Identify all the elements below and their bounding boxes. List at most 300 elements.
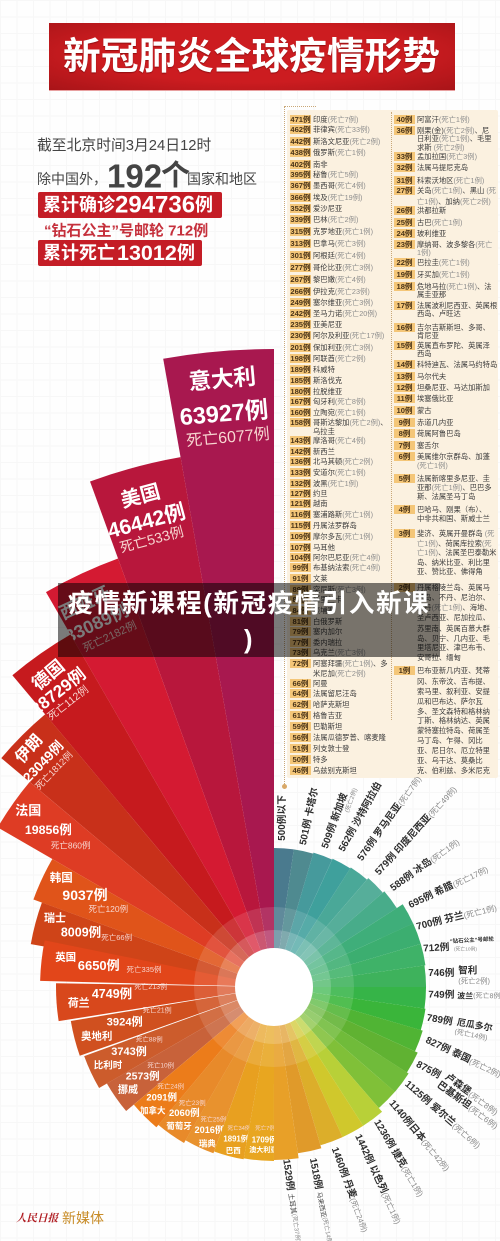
text: 乌兹别克斯坦 — [313, 766, 357, 775]
wedge: 奥地利 — [71, 987, 280, 1056]
wedge: 爱尔兰: 1125例 爱尔兰(死亡6例) — [402, 1077, 484, 1151]
text: 3例 — [399, 529, 410, 538]
wedge: 以色列: 1442例 以色列(死亡1例) — [352, 1132, 405, 1226]
text: 爱沙尼亚 — [313, 204, 342, 213]
wedge: 泰国 — [268, 987, 500, 1080]
text: 亚美尼亚 — [313, 320, 342, 329]
text: 新西兰 — [313, 447, 335, 456]
wedge: 厄瓜多尔 — [271, 987, 494, 1042]
wedge: 瑞士 — [27, 903, 274, 1027]
text: 115例 — [291, 521, 310, 530]
text: 巴勒斯坦 — [313, 722, 342, 731]
text: 丁斯、格林纳达、英属 — [417, 716, 490, 725]
wedge: 澳大利亚: 澳大利亚 — [249, 1145, 277, 1154]
wedge: 马来西亚 — [251, 987, 337, 1241]
text: 特多 — [313, 755, 328, 764]
text: 阿尔巴尼亚(死亡4例) — [313, 553, 380, 562]
text: 埃及(死亡19例) — [313, 193, 362, 202]
wedge: 罗马尼亚: 576例 罗马尼亚(死亡7例) — [354, 772, 424, 863]
text: 赤道几内亚 — [417, 418, 453, 427]
text: 克罗地亚(死亡1例) — [313, 227, 373, 236]
text: 美属维尔京群岛、加蓬 — [417, 452, 490, 461]
left half: wedges with labels — [0, 349, 304, 1164]
text: 367例 — [290, 181, 311, 190]
wedge: 美国: 美国 — [118, 480, 163, 513]
text: 107例 — [290, 543, 311, 552]
wedge: 美国 — [89, 457, 274, 1003]
text: 巴拉圭(死亡1例) — [417, 258, 470, 267]
wedge: 土耳其 — [250, 987, 305, 1241]
text: 墨西哥(死亡4例) — [313, 181, 366, 190]
text: 亚、乌干达、莫桑比 — [417, 756, 483, 765]
text: 苏丹(死亡1例)、海地、 — [417, 603, 492, 612]
wedge: 芬兰: 700例 芬兰(死亡1例) — [415, 900, 498, 933]
logo: People's Daily new media — [16, 1210, 104, 1226]
text: 1例) — [417, 248, 431, 257]
wedge: 英国 — [37, 940, 274, 1027]
text: 法属波利尼西亚、英属根 — [417, 301, 497, 310]
text: 玻利维亚 — [417, 229, 446, 238]
text: 克、伯利兹、多米尼克 — [417, 766, 490, 775]
wedge: 荷兰: 4749例 — [92, 986, 132, 1001]
confirmed cases label: 累计确诊 — [43, 194, 116, 215]
text: 230例 — [290, 331, 311, 340]
deaths label: 例 — [177, 243, 195, 263]
text: 136例 — [290, 457, 311, 466]
text: 巴哈马、刚果（布）、 — [417, 505, 486, 514]
text: 布基纳法索(死亡4例) — [313, 563, 380, 572]
wedge: 瑞典: 瑞典 — [199, 1138, 216, 1148]
text: 31例 — [396, 176, 413, 185]
text: 安道尔(死亡1例) — [313, 468, 366, 477]
text: 235例 — [290, 320, 311, 329]
text: 岛、贝宁、几内亚、毛 — [417, 634, 490, 643]
title banner — [49, 23, 455, 91]
text: 59例 — [292, 722, 309, 731]
text: 秘鲁(死亡5例) — [313, 170, 358, 179]
text: 蒙特塞拉特岛、荷属圣 — [417, 726, 490, 735]
text: 柬埔寨 — [313, 606, 335, 615]
text: 斯里兰卡 — [313, 595, 342, 604]
wedge: 澳大利亚: 1709例 — [252, 1134, 277, 1144]
wedge: 比利时: 死亡88例 — [136, 1034, 163, 1044]
text: 摩纳哥、波多黎各(死亡 — [417, 240, 492, 249]
wedge: 瑞士: 死亡66例 — [101, 932, 132, 942]
wedge: 伊朗: 伊朗 — [12, 731, 46, 767]
text: 埃塞俄比亚 — [417, 394, 453, 403]
text: 巴林(死亡2例) — [313, 215, 358, 224]
wedge: 印度尼西亚 — [274, 782, 459, 1000]
deaths label: 13012 — [117, 241, 177, 265]
text: 109例 — [290, 532, 311, 541]
wedge: 德国: 德国 — [27, 655, 69, 694]
wedge: 捷克 — [256, 987, 428, 1199]
text: 266例 — [290, 287, 311, 296]
wedge: 韩国: 韩国 — [50, 870, 73, 884]
text: 17例 — [396, 301, 413, 310]
text: 孟加拉国(死亡3例) — [417, 152, 477, 161]
wedge: 韩国: 9037例 — [62, 887, 108, 903]
text: 丹属格陵兰岛、英属马 — [417, 583, 490, 592]
text: 摩洛哥(死亡4例) — [313, 436, 366, 445]
wedge: 新加坡 — [274, 787, 359, 993]
text: 7例 — [399, 441, 410, 450]
text: 亡1例)、加纳(死亡2例) — [417, 197, 491, 206]
text: 84例 — [292, 606, 309, 615]
text: 科特迪瓦、法属马约特岛 — [417, 360, 497, 369]
wedge: 厄瓜多尔: 厄瓜多尔 — [456, 1016, 494, 1033]
text: 116例 — [291, 510, 310, 519]
text: 127例 — [290, 489, 311, 498]
text: 64例 — [292, 689, 309, 698]
text: 167例 — [290, 397, 311, 406]
text: 15例 — [396, 341, 413, 350]
confirmed cases label: 例 — [195, 195, 213, 215]
wedge: 法国: 法国 — [15, 803, 41, 818]
text: 米尼加(死亡2例) — [313, 669, 366, 678]
wedge: 法国 — [0, 782, 274, 1029]
text: 吉尔吉斯斯坦、多哥、 — [417, 323, 490, 332]
text: 西岛、卢旺达 — [417, 309, 461, 318]
text: 339例 — [290, 215, 311, 224]
wedge: 500例以下: 500例以下 — [275, 795, 288, 841]
country count: 国家和地区 — [187, 171, 257, 187]
text: 121例 — [290, 499, 311, 508]
text: 古巴(死亡1例) — [417, 218, 462, 227]
text: 岛、纳米比亚、利比里 — [417, 558, 490, 567]
wedge: 挪威: 挪威 — [118, 1083, 138, 1096]
wedge: 卡塔尔 — [274, 786, 321, 990]
text: 26例 — [396, 206, 413, 215]
wedge: 伊朗: 死亡1812例 — [33, 749, 74, 792]
text: 斐济、英属开曼群岛 (死 — [417, 529, 494, 538]
text: 丹属法罗群岛 — [313, 521, 357, 530]
text: 32例 — [396, 163, 413, 172]
text: 立陶宛(死亡1例) — [313, 408, 366, 417]
wedge: 英国: 死亡335例 — [126, 964, 162, 974]
text: 阿根廷(死亡4例) — [313, 251, 366, 260]
wedge: 智利 — [274, 964, 490, 1008]
text: 匈牙利(死亡8例) — [313, 397, 366, 406]
wedge: 印度尼西亚: 579例 印度尼西亚(死亡49例) — [372, 782, 459, 878]
wedge: 比利时 — [84, 987, 286, 1089]
text: 9例 — [399, 418, 410, 427]
logo: People's Daily new media: 新媒体 — [62, 1210, 104, 1226]
wedge: 比利时: 3743例 — [111, 1044, 147, 1058]
text: 19例 — [396, 270, 413, 279]
text: 198例 — [290, 354, 311, 363]
wedge: 巴西 — [214, 987, 303, 1162]
text: 斯洛文尼亚(死亡2例) — [313, 137, 380, 146]
text: 阿塞拜疆(死亡1例)、多 — [313, 659, 388, 668]
wedge: 瑞典: 死亡25例 — [201, 1116, 226, 1124]
text: 法属新喀里多尼亚、圭 — [417, 474, 490, 483]
text: 158例 — [290, 418, 311, 427]
text: 18例 — [396, 282, 413, 291]
text: 菲律宾(死亡33例) — [313, 125, 370, 134]
text: 摩尔多瓦(死亡1例) — [313, 532, 373, 541]
wedge: 罗马尼亚 — [274, 772, 424, 998]
wedge: 荷兰: 荷兰 — [68, 995, 90, 1009]
wedge: 卡塔尔: 501例 卡塔尔 — [296, 786, 321, 846]
text: 圣卢西亚、尼加拉瓜、 — [417, 613, 490, 622]
country list text — [290, 115, 497, 775]
country count: 192 — [107, 158, 162, 194]
wedge: 奥地利: 奥地利 — [81, 1030, 112, 1043]
wedge: 土耳其: 1529例 土耳其 (死亡37例) — [280, 1158, 305, 1241]
text: 日利亚(死亡1例)、毛里 — [417, 134, 492, 143]
text: 73例 — [292, 648, 309, 657]
wedge: 智利: 746例 — [428, 966, 455, 979]
text: 亚、赞比亚、佛得角 — [417, 567, 483, 576]
text: 冈、东帝汶、吉布提、 — [417, 677, 490, 686]
text: 160例 — [290, 408, 311, 417]
logo: People's Daily new media: 人民日报 — [16, 1210, 59, 1226]
text: 249例 — [290, 298, 311, 307]
text: 属圭亚那 — [417, 290, 446, 299]
wedge: 卢森堡 巴基斯坦: 巴基斯坦(死亡6例) — [435, 1078, 500, 1132]
text: 2例 — [399, 583, 410, 592]
wedge: 以色列 — [254, 987, 405, 1226]
text: 洪都拉斯 — [417, 206, 446, 215]
text: 里塔尼亚、津巴布韦、 — [417, 643, 490, 652]
wedge: 沙特阿拉伯 — [274, 779, 384, 995]
text: 俄罗斯(死亡1例) — [313, 148, 366, 157]
text: 南非 — [313, 160, 328, 169]
text: 11例 — [397, 394, 412, 403]
text: 中非共和国、斯威士兰 — [417, 514, 490, 523]
text: 33例 — [396, 152, 413, 161]
text: 438例 — [290, 148, 311, 157]
wedge: 荷兰: 死亡213例 — [134, 982, 167, 991]
text: 10例 — [396, 406, 413, 415]
overlay caption: 疫情新课程(新冠疫情引入新课 — [68, 590, 430, 618]
text: 23例 — [396, 240, 413, 249]
wedge: 沙特阿拉伯: 562例 沙特阿拉伯 — [335, 779, 384, 854]
confirmed cases label — [38, 192, 222, 218]
text: 哥伦比亚(死亡3例) — [313, 263, 373, 272]
text: 16例 — [396, 323, 413, 332]
wedge: 奥地利: 3924例 — [107, 1014, 143, 1028]
wedge: 丹麦 — [253, 987, 373, 1234]
text: 科威特 — [313, 365, 335, 374]
panel: country list — [287, 110, 498, 778]
text: 法属瓜德罗普、喀麦隆 — [313, 733, 386, 742]
wedge: 加拿大: 加拿大 — [140, 1106, 166, 1116]
wedge: 波兰 — [274, 987, 500, 1009]
text: 143例 — [290, 436, 311, 445]
text: 87例 — [292, 595, 309, 604]
text: 牙买加(死亡1例) — [417, 270, 470, 279]
wedge: 卢森堡 巴基斯坦: 875例 — [414, 1057, 443, 1081]
wedge: 意大利 — [163, 349, 274, 987]
text: 462例 — [290, 125, 311, 134]
text: 马耳他 — [313, 543, 335, 552]
text: 61例 — [292, 711, 309, 720]
text: 315例 — [290, 227, 311, 236]
wedge: 法国: 死亡860例 — [51, 840, 91, 850]
text: 印度(死亡7例) — [313, 115, 358, 124]
wedge: 丹麦: 1460例 丹麦(死亡24例) — [329, 1145, 373, 1234]
wedge: 捷克: 1236例 捷克(死亡1例) — [371, 1117, 428, 1199]
text: 巴布亚新几内亚、梵蒂 — [417, 666, 490, 675]
text: 13例 — [396, 372, 413, 381]
wedge: 法国: 19856例 — [25, 822, 72, 837]
wedge: 瑞典: 2016例 — [194, 1124, 224, 1135]
text: 24例 — [396, 229, 413, 238]
text: 乌拉圭 — [313, 427, 335, 436]
center rings and hole — [194, 907, 354, 1067]
text: 99例 — [292, 563, 309, 572]
wedge: 挪威: 死亡10例 — [147, 1060, 174, 1070]
text: 科索沃地区(死亡1例) — [417, 176, 484, 185]
text: 关岛(死亡1例)、黑山 (死 — [417, 186, 496, 195]
text: 395例 — [290, 170, 311, 179]
wedge: 巴西: 巴西 — [226, 1146, 241, 1155]
text: 白俄罗斯 — [313, 617, 342, 626]
text: 62例 — [292, 700, 309, 709]
text: 36例 — [396, 126, 413, 135]
wedge: 巴西: 死亡34例 — [227, 1124, 251, 1132]
text: 亡1例)、法属圣巴泰勒米 — [417, 548, 496, 557]
wedge: 意大利: 死亡6077例 — [186, 425, 270, 450]
text: 201例 — [290, 343, 311, 352]
text: 352例 — [290, 204, 311, 213]
wedge: 伊朗: 23049例 — [19, 737, 66, 785]
text: 西岛 — [417, 349, 432, 358]
wedge: 厄瓜多尔: (死亡14例) — [454, 1027, 488, 1042]
text: 22例 — [396, 258, 413, 267]
wedge: 葡萄牙: 葡萄牙 — [166, 1121, 192, 1131]
text: 阿曼 — [313, 679, 328, 688]
wedge: 德国: 死亡112例 — [45, 683, 91, 723]
text: 巴拿马(死亡3例) — [313, 239, 366, 248]
wedge: 葡萄牙: 2060例 — [169, 1107, 200, 1119]
text: 约旦 — [313, 489, 328, 498]
wedge: 新加坡: (死亡2例) — [343, 787, 359, 814]
wedge: 美国: 死亡533例 — [118, 523, 185, 555]
text: 越南 — [313, 499, 328, 508]
text: 4例 — [399, 505, 410, 514]
text: 12例 — [396, 383, 413, 392]
wedge: 希腊: 695例 希腊(死亡17例) — [406, 862, 490, 911]
wedge: 比利时: 比利时 — [94, 1060, 123, 1072]
text: 313例 — [290, 239, 311, 248]
country count — [37, 158, 257, 194]
text: 苏里南、英属百慕大群 — [417, 624, 490, 633]
wedge: 挪威: 2573例 — [126, 1070, 160, 1083]
text: 阿尔及利亚(死亡17例) — [313, 331, 384, 340]
wedge: 卢森堡 巴基斯坦 — [265, 987, 500, 1132]
text: 哥斯达黎加(死亡2例)、 — [313, 418, 388, 427]
wedge: 爱尔兰 — [262, 987, 484, 1151]
wedge: 挪威 — [107, 987, 291, 1113]
text: 黎巴嫩(死亡4例) — [313, 275, 366, 284]
text: 366例 — [290, 193, 311, 202]
wedge: 韩国 — [30, 859, 274, 1026]
text: 189例 — [290, 365, 311, 374]
wedge: 西班牙: 死亡2182例 — [81, 618, 139, 655]
wedge: 冰岛 — [274, 835, 462, 1003]
text: 46例 — [292, 766, 309, 775]
text: 8例 — [399, 429, 410, 438]
wedge: 瑞士: 8009例 — [61, 925, 101, 940]
text: 442例 — [290, 137, 311, 146]
text: 法属留尼汪岛 — [313, 689, 357, 698]
text: 6例 — [399, 452, 410, 461]
text: 塞尔维亚(死亡3例) — [313, 298, 373, 307]
wedge: 韩国: 死亡120例 — [88, 904, 128, 914]
text: 列支敦士登 — [313, 744, 349, 753]
text: 瓜和巴布达、萨尔瓦 — [417, 697, 483, 706]
text: 波黑(死亡1例) — [313, 479, 358, 488]
text: 危地马拉(死亡1例)、法 — [417, 282, 492, 291]
wedge: 德国: 28729例 — [27, 664, 89, 719]
text: 89例 — [292, 585, 309, 594]
text: 英属直布罗陀、英属泽 — [417, 341, 490, 350]
text: 185例 — [290, 376, 311, 385]
text: 77例 — [292, 638, 309, 647]
deaths label: 累计死亡 — [43, 243, 115, 263]
wedge: 西班牙 — [44, 559, 274, 1014]
text: 81例 — [292, 617, 309, 626]
wedge: 葡萄牙 — [158, 987, 298, 1145]
wedge: 钻石公主号邮轮: 712例 — [423, 940, 450, 954]
text: 50例 — [292, 755, 309, 764]
wedge: 钻石公主号邮轮: “钻石公主”号邮轮 — [450, 935, 495, 945]
text: 马丁岛、乍得、冈比 — [417, 736, 483, 745]
cruise ship line: “钻石公主”号邮轮 712例 — [44, 222, 208, 240]
wedge: 卢森堡 巴基斯坦: 卢森堡(死亡8例) — [443, 1070, 500, 1118]
text: 133例 — [290, 468, 311, 477]
wedge: 美国: 46442例 — [105, 500, 188, 543]
text: 突尼斯(死亡3例) — [313, 585, 366, 594]
text: 104例 — [290, 553, 311, 562]
wedge: 冰岛: 588例 冰岛(死亡1例) — [387, 835, 462, 894]
wedge: 钻石公主号邮轮: (死亡10例) — [454, 946, 477, 952]
right half: wedges with labels — [250, 772, 500, 1241]
wedge: 德国 — [9, 635, 274, 1022]
text: 恩岛、不丹、尼泊尔、 — [417, 593, 490, 602]
text: 塞舌尔 — [417, 441, 439, 450]
text: 25例 — [396, 218, 413, 227]
text: 委内瑞拉 — [313, 638, 342, 647]
text: 阿联酋(死亡2例) — [313, 354, 366, 363]
wedge: 澳大利亚: 死亡7例 — [255, 1124, 275, 1132]
deaths label — [38, 240, 202, 266]
wedge: 伊朗 — [0, 714, 274, 1027]
date line: 截至北京时间3月24日12时 — [37, 137, 212, 154]
overlay caption: ) — [244, 626, 254, 654]
text: 27例 — [396, 186, 413, 195]
text: 277例 — [290, 263, 311, 272]
wedge: 荷兰 — [55, 982, 274, 1025]
text: 伊拉克(死亡23例) — [313, 287, 370, 296]
wedge: 加拿大 — [134, 987, 294, 1129]
text: 荷属阿鲁巴岛 — [417, 429, 461, 438]
text: 求斯 (死亡2例) — [417, 143, 464, 152]
text: 40例 — [396, 115, 413, 124]
wedge: 瑞典 — [186, 987, 301, 1156]
summary statistics — [37, 137, 257, 266]
wedge: 钻石公主号邮轮 — [274, 935, 495, 1008]
text: 肯尼亚 — [417, 331, 439, 340]
text: 79例 — [292, 627, 309, 636]
text: 402例 — [290, 160, 311, 169]
wedge: 智利: (死亡2例) — [458, 976, 490, 986]
wedge: 加拿大: 死亡24例 — [157, 1082, 184, 1090]
text: 56例 — [292, 733, 309, 742]
